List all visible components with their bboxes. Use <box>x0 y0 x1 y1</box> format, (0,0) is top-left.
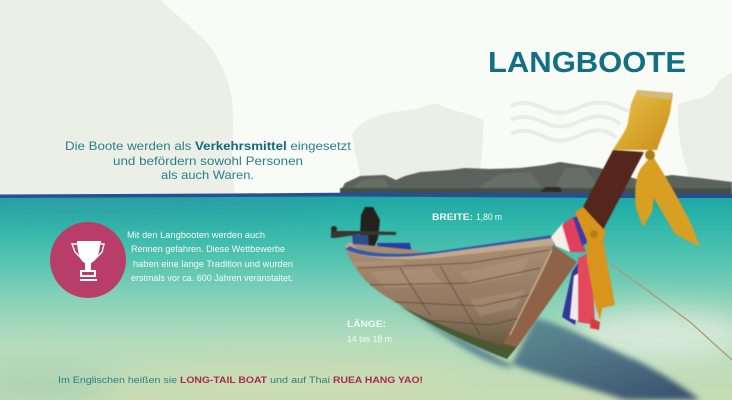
wave lines decoration <box>511 103 630 141</box>
race paragraph: erstmals vor ca. 600 Jahren veranstaltet. <box>131 273 293 283</box>
race paragraph: Rennen gefahren. Diese Wettbewerbe <box>131 244 285 254</box>
horizon band <box>0 192 732 198</box>
race paragraph <box>127 230 293 283</box>
bottom fact line: LONG-TAIL BOAT <box>180 375 267 386</box>
icon: trophy <box>72 241 104 281</box>
pale cloud shape: middle <box>352 103 484 185</box>
intro text: und befördern sowohl Personen <box>113 154 303 168</box>
bow plate <box>503 245 577 347</box>
title: LANGBOOTE <box>488 47 686 79</box>
bottom fact line <box>58 375 423 386</box>
long-tail boat <box>331 90 700 359</box>
hull waterline <box>400 306 515 359</box>
water colour variation <box>0 193 732 400</box>
plank lines <box>358 250 550 335</box>
label: width: BREITE: <box>432 212 473 222</box>
colourful cloths on bow <box>551 207 615 330</box>
race paragraph: haben eine lange Tradition und wurden <box>133 259 293 269</box>
gunwale <box>345 236 553 259</box>
intro text: als auch Waren. <box>161 168 254 182</box>
intro text: Die Boote werden als Verkehrsmittel eingesetzt <box>65 139 352 153</box>
intro text <box>65 139 352 182</box>
label: length: LÄNGE: <box>347 319 386 329</box>
boat engine <box>331 207 396 252</box>
pale cloud shape: right <box>678 72 732 184</box>
boat cargo <box>352 235 412 255</box>
boat shadow on water <box>395 300 700 400</box>
bottom fact line: RUEA HANG YAO! <box>333 375 423 386</box>
race paragraph: Mit den Langbooten werden auch <box>127 230 265 240</box>
bottom fact line: und auf Thai <box>270 375 330 386</box>
label: length: 14 bis 18 m <box>347 334 392 344</box>
yellow ribbon on prow <box>613 90 700 247</box>
hull <box>345 244 577 359</box>
label: length <box>347 319 392 344</box>
distant limestone islands <box>340 162 732 196</box>
trophy badge <box>50 222 126 298</box>
pale cloud shape: left <box>0 0 236 196</box>
prow post <box>583 150 644 230</box>
bottom fact line: Im Englischen heißen sie <box>58 375 177 386</box>
badge circle <box>50 222 126 298</box>
mooring rope <box>609 263 732 360</box>
sea <box>0 195 732 400</box>
label: width: 1,80 m <box>476 212 502 222</box>
sky background <box>0 0 732 200</box>
plank highlights <box>350 258 530 316</box>
